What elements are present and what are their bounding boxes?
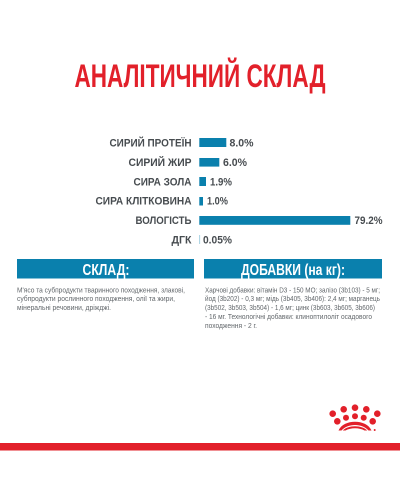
text block: additives: - 16 мг. Технологічні добавки: клиноптилоліт осадового — [205, 313, 372, 321]
row: crude protein: СИРИЙ ПРОТЕЇН — [110, 136, 192, 150]
panel: composition — [17, 259, 194, 312]
heading: composition: СКЛАД: — [82, 262, 130, 279]
text block: composition: субпродукти рослинного походження, олії та жири, — [17, 295, 175, 303]
row: crude protein — [110, 136, 254, 150]
row: DHA — [172, 234, 232, 246]
row: DHA: ДГК — [172, 234, 192, 246]
panel: additives — [204, 259, 382, 330]
footer band — [0, 443, 400, 450]
row: crude ash: СИРА ЗОЛА — [134, 176, 192, 188]
row: DHA: 0.05% — [203, 234, 232, 246]
text block: additives: йод (3b202) - 0,3 мг; мідь (3b405, 3b406): 2,4 мг; марганець — [205, 295, 380, 303]
row: crude fibre: СИРА КЛІТКОВИНА — [96, 196, 192, 208]
row: crude ash: 1.9% — [210, 176, 232, 188]
text block: additives: (3b502, 3b503, 3b504) - 1,6 мг; цинк (3b603, 3b605, 3b606) — [205, 305, 375, 312]
row: crude fat: 6.0% — [223, 157, 247, 169]
row: crude ash — [134, 176, 232, 188]
heading: additives — [204, 259, 382, 279]
row: moisture: ВОЛОГІСТЬ — [136, 215, 192, 227]
text block: composition: М'ясо та субпродукти тваринного походження, злакові, — [17, 286, 185, 294]
row: crude protein: 8.0% — [230, 138, 254, 150]
text block: additives: Харчові добавки: вітамін D3 - 150 МО; залізо (3b103) - 5 мг; — [205, 286, 380, 294]
row: moisture: 79.2% — [354, 215, 383, 227]
bar chart: analytical composition — [96, 136, 383, 246]
heading: additives: ДОБАВКИ (на кг): — [241, 262, 345, 279]
row: crude fat — [128, 156, 247, 169]
row: moisture — [136, 215, 383, 227]
icon: royal canin crown logo — [329, 404, 381, 431]
heading: composition — [17, 259, 194, 279]
row: crude fat: СИРИЙ ЖИР — [128, 156, 192, 169]
row: crude fibre: 1.0% — [207, 196, 228, 208]
text block: composition: мінеральні речовини, дріжджі. — [17, 304, 111, 312]
text block: additives: походження - 2 г. — [205, 323, 257, 330]
